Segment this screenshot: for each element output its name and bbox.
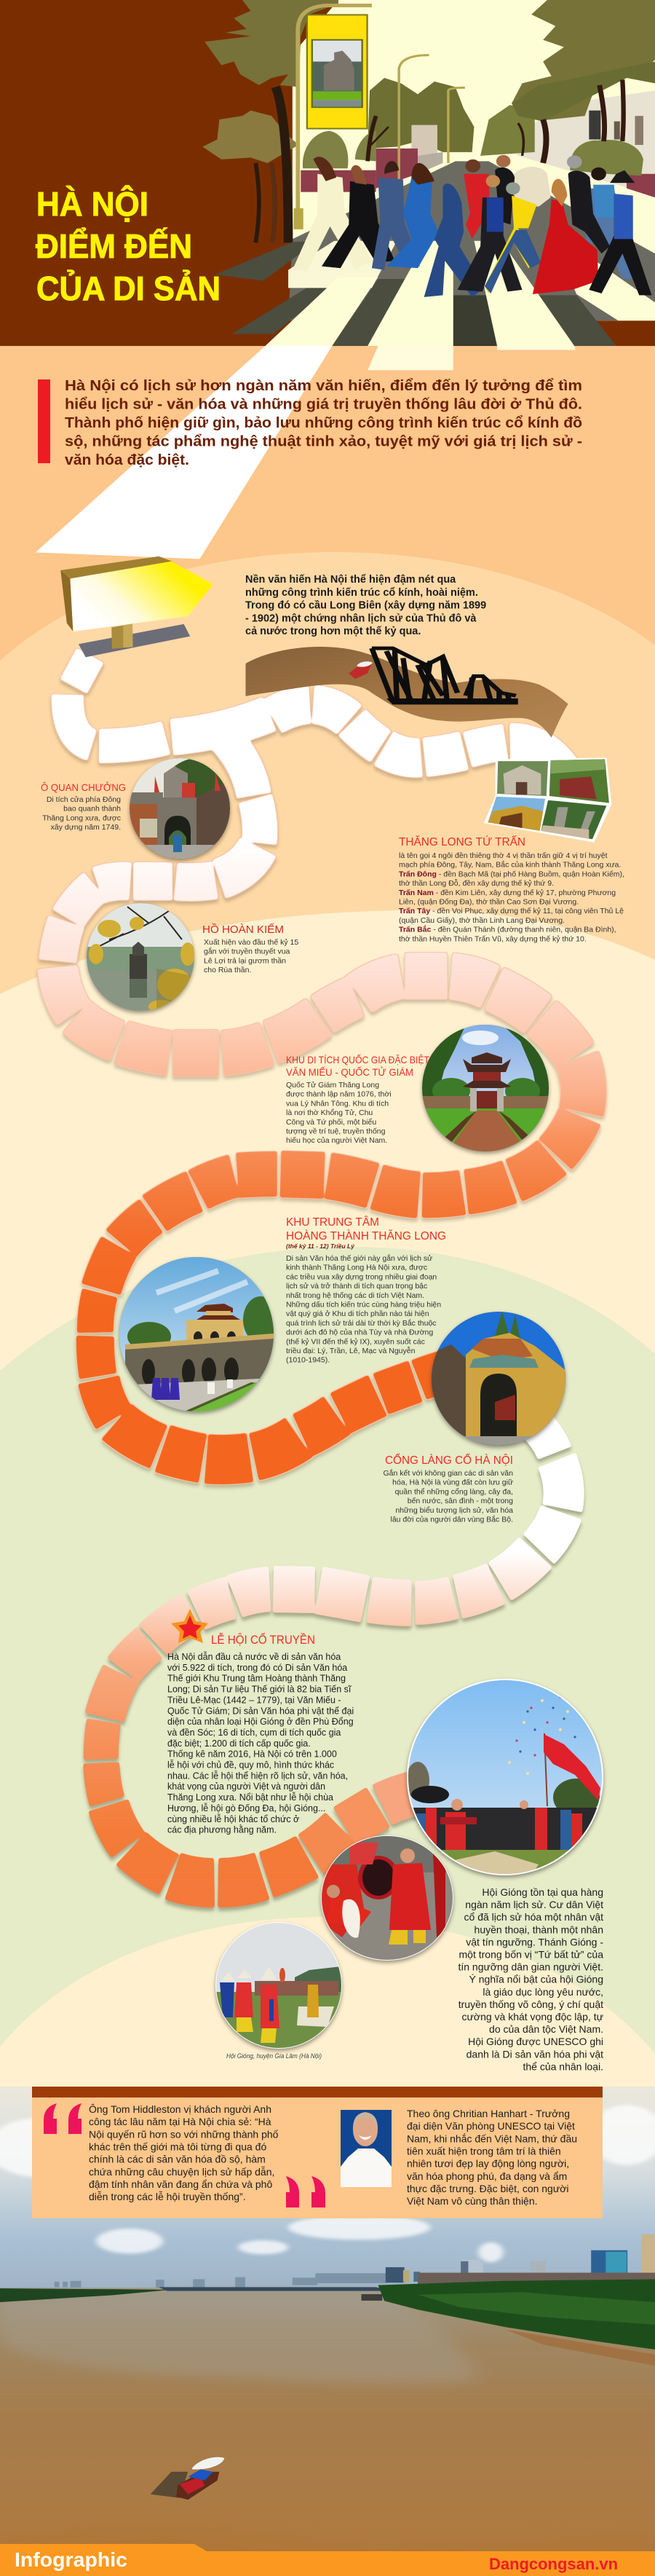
label: O Quan Chuong: bao quanh thành [63,805,121,814]
label: Le hoi co truyen: Thăng Long xưa. Nổi bật như lễ hội chùa [167,1792,333,1803]
label: Van Mieu Quoc Tu Giam: vua Lý Nhân Tông. Khu di tích [286,1099,389,1108]
label: Le hoi co truyen: Thế giới Khu Trung tâm Hoàng thành Thăng [167,1674,346,1684]
street lamps [399,55,465,181]
label: Cong lang co Ha Noi: hóa, Hà Nội là vùng đất còn lưu giữ [392,1478,513,1487]
signpost [60,556,213,657]
panel: river photo [0,2087,655,2576]
label: O Quan Chuong: Di tích cửa phía Đông [47,795,121,804]
label: Thang Long Tu Tran: thờ thần Huyền Thiên Trấn Vũ, xây dựng thế kỷ thứ 10. [399,934,587,943]
label: Hoang Thanh Thang Long: Những dấu tích kiến trúc cùng hàng triệu hiện [286,1301,441,1309]
text: Hoi Giong description: ngàn năm lịch sử. Cư dân Việt [465,1899,603,1910]
label: Van Mieu Quoc Tu Giam: tượng về trí tuệ, truyền thống [286,1127,386,1136]
label: Hoang Thanh Thang Long: lịch sử và trở thành di tích quan trọng bậc [286,1282,427,1291]
title: CỦA DI SẢN [36,269,221,307]
label: Ho Hoan Kiem: cho Rùa thần. [204,966,251,974]
photo: Hoan Kiem lake and Turtle Tower [87,903,195,1014]
label: Cong lang co Ha Noi [383,1453,513,1524]
label: O Quan Chuong: Ô QUAN CHƯỞNG [41,781,126,793]
label: Le hoi co truyen [167,1633,354,1835]
panel: quotes [32,2087,603,2218]
illustration: Long Bien bridge on river ribbon [246,647,568,738]
intro text: Hà Nội có lịch sử hơn ngàn năm văn hiến, điểm đến lý tưởng để tìm [65,378,582,394]
quote: Christian Hanhart: Nam, khi nhắc đến Việt Nam, thứ đầu [407,2132,577,2144]
label: Hoang Thanh Thang Long: (thế kỷ 11 - 12) Triều Lý [286,1242,355,1250]
text: Hoi Giong description: tín ngưỡng dân gian người Việt. [458,1961,603,1973]
label: Thang Long Tu Tran: - đền Kim Liên, xây dựng thế kỷ 17, phường Phương [434,889,616,897]
quote: Tom Hiddleston: chứa những câu chuyện lịch sử hấp dẫn, [89,2166,274,2178]
quote: Christian Hanhart: Việt Nam vô cùng thân thiện. [407,2195,538,2207]
label: Thang Long Tu Tran: (quận Cầu Giấy), thờ thần Linh Lang Đại Vương. [399,916,565,925]
footer: Infographic [15,2548,127,2571]
icon: closing quotation mark [286,2176,325,2207]
quote: Tom Hiddleston: Ông Tom Hiddleston vị khách người Anh [89,2103,271,2115]
portrait: Christian Hanhart [341,2110,392,2187]
text: Hoi Giong description: huyền thoại, thành một nhân [475,1923,603,1935]
intro text: Thành phố hiện giữ gìn, bảo lưu những công trình kiến trúc cổ kính đồ [65,415,582,431]
label: Hoang Thanh Thang Long: (1010-1945). [286,1356,330,1365]
label: Ho Hoan Kiem: HỒ HOÀN KIẾM [202,923,284,936]
label: Thang Long Tu Tran: là tên gọi 4 ngôi đền thiêng thờ 4 vị thần trấn giữ 4 vị trí huyệt [399,851,608,860]
label: Hoang Thanh Thang Long: KHU TRUNG TÂM [286,1215,379,1229]
text: Hoi Giong description: do của dân tộc Việt Nam. [489,2023,603,2035]
label: Cong lang co Ha Noi: quần thể những cổng làng, cây đa, [395,1487,513,1496]
label: Van Mieu Quoc Tu Giam: Quốc Tử Giám Thăng Long [286,1081,379,1090]
photo: Thang Long Imperial Citadel [119,1257,278,1413]
label: Hoang Thanh Thang Long: (thế kỷ VII đến thế kỷ IX), xuyên suốt các [286,1337,425,1346]
label: Thang Long Tu Tran [399,835,624,943]
parked car [509,167,551,207]
label: Ho Hoan Kiem: Lê Lợi trả lại gươm thần [204,956,286,965]
Nen van hien text block: Trong đó có cầu Long Biên (xây dựng năm 1899 [245,600,486,612]
label: Thang Long Tu Tran: Trấn Bắc [399,925,432,934]
text: Hoi Giong description: vật tín ngưỡng. Thánh Gióng - [466,1936,603,1947]
label: Hoang Thanh Thang Long: vật quý giá ở Khu di tích phần nào tái hiện [286,1309,429,1318]
quote: Tom Hiddleston: Nội quyến rũ hơn so với những thành phố [89,2128,279,2140]
text: Hoi Giong description: là giáo dục lòng yêu nước, [483,1986,603,1998]
label: Le hoi co truyen: khát vọng của người Việt và người dân [167,1781,325,1792]
label: Hoang Thanh Thang Long: triều đại: Lý, Trần, Lê, Mạc và Nguyễn [286,1346,416,1355]
quote: Tom Hiddleston: khác trên thế giới mà tôi từng đi qua đó [89,2140,266,2152]
label: Le hoi co truyen: các địa phương hằng năm. [167,1824,277,1835]
label: Hoang Thanh Thang Long: kinh thành Thăng Long Hà Nội xưa, được [286,1264,427,1272]
label: O Quan Chuong: Thăng Long xưa, được [42,814,121,822]
label: Ho Hoan Kiem [202,923,298,974]
label: Thang Long Tu Tran: - đền Voi Phục, xây dựng thế kỷ 11, tại công viên Thủ Lệ [430,907,624,915]
label: Le hoi co truyen: lễ hội với chủ đề, quy mô, hình thức khác [167,1760,334,1770]
label: O Quan Chuong: xây dựng năm 1749. [51,823,121,832]
label: Ho Hoan Kiem: gắn với truyền thuyết vua [204,947,290,956]
label: Le hoi co truyen: Long; Di sản Tư liệu Thế giới là 82 bia Tiến sĩ [167,1685,352,1695]
Nen van hien text block: Nền văn hiến Hà Nội thể hiện đậm nét qua [245,574,456,586]
label: Le hoi co truyen: cùng nhiều lễ hội khác tổ chức ở [167,1813,299,1824]
quote: Christian Hanhart: thực đặc trưng. Đặc biệt, con người [407,2183,569,2194]
intro text: sộ, những tác phẩm nghệ thuật tinh xảo, tuyệt mỹ với giá trị lịch sử - [65,434,582,450]
label: Cong lang co Ha Noi: CỔNG LÀNG CỔ HÀ NỘI [385,1453,513,1467]
quote: Christian Hanhart: tiên xuất hiện trong tâm trí là thiên [407,2145,561,2156]
title: ĐIỂM ĐẾN [36,227,192,265]
label: Le hoi co truyen: Thống kê năm 2016, Hà Nội có trên 1.000 [167,1749,337,1760]
caption: Hoi Giong photo: Hội Gióng, huyện Gia Lâm (Hà Nội) [226,2052,322,2060]
quote: Tom Hiddleston: công tác lâu năm tại Hà Nội chia sẻ: “Hà [89,2116,271,2127]
label: Hoang Thanh Thang Long: nhất trong hệ thống các di tích Việt Nam. [286,1291,424,1300]
intro text: văn hóa đặc biệt. [65,452,189,468]
photo: Giong festival procession [215,1922,342,2050]
label: Hoang Thanh Thang Long [286,1215,446,1365]
label: Cong lang co Ha Noi: Gắn kết với không gian các di sản văn [383,1468,513,1478]
text: Hoi Giong description: Ý nghĩa nổi bật của hội Gióng [469,1974,603,1985]
icon: star [171,1609,208,1643]
crowd crossing the road [293,155,651,297]
photo: village gate [432,1311,566,1446]
label: Van Mieu Quoc Tu Giam: KHU DI TÍCH QUỐC GIA ĐẶC BIỆT [286,1053,429,1066]
text: Hoi Giong description: danh là Di sản văn hóa phi vật [467,2048,603,2060]
Nen van hien text block: cả nước trong hơn một thế kỷ qua. [245,626,421,637]
street banner [294,5,372,229]
label: Thang Long Tu Tran: Trấn Đông [399,870,437,878]
text: Hoi Giong description: Hội Gióng tồn tại qua hàng [482,1886,603,1898]
label: Van Mieu Quoc Tu Giam: VĂN MIẾU - QUỐC TỬ GIÁM [286,1066,413,1078]
label: Van Mieu Quoc Tu Giam: được thành lập năm 1076, thời [286,1090,392,1099]
label: Le hoi co truyen: Quốc Tử Giám; Di sản Văn hóa phi vật thể đại [167,1706,354,1716]
text: Hoi Giong description: một trong bốn vị “Tứ bất tử” của [458,1949,603,1961]
photo collage: four guardian temples [484,758,611,842]
text: Hoi Giong description: thể của nhân loại. [523,2060,603,2072]
label: Le hoi co truyen: nhau. Các lễ hội thể hiện rõ lịch sử, văn hóa, [167,1770,348,1781]
title: HÀ NỘI [36,185,148,223]
label: Le hoi co truyen: với 5.922 di tích, trong đó có Di sản Văn hóa [167,1663,347,1673]
footer [0,2544,655,2576]
quote: Christian Hanhart: đại diện Văn phòng UNESCO tại Việt [407,2120,575,2132]
road: path of tiles from the village gate to the festival photos [101,1424,564,1883]
label: Hoang Thanh Thang Long: HOÀNG THÀNH THĂNG LONG [286,1229,446,1242]
label: Le hoi co truyen: và đền Sóc; 16 di tích, cụm di tích quốc gia [167,1728,341,1738]
label: Cong lang co Ha Noi: bến nước, sân đình - một trong [408,1497,513,1505]
intro text [65,378,582,468]
icon: opening quotation mark [44,2103,82,2134]
quote: Tom Hiddleston: đậm tính nhân văn đang ẩn chứa và phô [89,2178,272,2190]
zebra crossing [215,241,655,346]
text: Hoi Giong description: cường và khát vọng độc lập, tự [462,2011,603,2022]
photo: Giong festival main [406,1679,603,1875]
label: Hoang Thanh Thang Long: quá trình lịch sử trải dài từ thời kỳ Bắc thuộc [286,1318,437,1328]
photo: Giong festival drum [321,1835,453,1961]
label: Thang Long Tu Tran: THĂNG LONG TỨ TRẤN [399,835,525,848]
label: Le hoi co truyen: LỄ HỘI CỔ TRUYỀN [211,1633,315,1647]
label: Hoang Thanh Thang Long: Di sản Văn hóa thế giới này gắn với lịch sử [286,1253,432,1263]
label: Van Mieu Quoc Tu Giam: là nơi thờ Khổng Tử, Chu [286,1108,373,1117]
footer: Dangcongsan.vn [489,2555,618,2573]
quote: Christian Hanhart: văn hóa phong phú, đa dạng và ẩm [407,2170,567,2182]
quote: Christian Hanhart: nhiên tươi đẹp lay động lòng người, [407,2158,569,2170]
label: O Quan Chuong [41,781,126,832]
text: Hoi Giong description: cổ đã lịch sử hóa một nhân vật [464,1911,603,1923]
quote: Tom Hiddleston: diễn trong các lễ hội truyền thống”. [89,2191,246,2202]
title [36,185,221,307]
Nen van hien text block: - 1902) một chứng nhân lịch sử của Thủ đô và [245,613,477,624]
intro text: hiểu lịch sử - văn hóa và những giá trị truyền thống lâu đời ở Thủ đô. [65,396,582,412]
photo: Van Mieu Quoc Tu Giam [422,1025,549,1152]
road: path of tiles from the signpost to the village gate [57,654,584,1460]
label: Cong lang co Ha Noi: lâu đời của người dân vùng Bắc Bộ. [390,1515,513,1524]
white road stripes leading out of the header [36,346,576,559]
panel: header scene [0,0,655,346]
label: Van Mieu Quoc Tu Giam: Công và Tứ phối, một biểu [286,1118,376,1127]
label: Van Mieu Quoc Tu Giam [286,1053,429,1145]
intro accent bar [38,379,50,463]
label: Ho Hoan Kiem: Xuất hiện vào đầu thế kỷ 15 [204,938,298,947]
label: Le hoi co truyen: diện của nhân loại Hội Gióng ở đền Phù Đổng [167,1717,354,1727]
label: Le hoi co truyen: Hương, lễ hội gò Đống Đa, hội Gióng... [167,1803,325,1813]
text: Hoi Giong description: truyền thống võ công, ý chí quật [458,1998,603,2010]
label: Cong lang co Ha Noi: những biểu tượng lịch sử, văn hóa [395,1506,513,1515]
label: Hoang Thanh Thang Long: dưới ách đô hộ của nhà Tùy và nhà Đường [286,1328,433,1337]
label: Thang Long Tu Tran: Trấn Tây [399,907,430,915]
label: Thang Long Tu Tran: - đền Bạch Mã (tại phố Hàng Buồm, quận Hoàn Kiếm), [437,870,624,878]
quote: Christian Hanhart: Theo ông Chritian Hanhart - Trưởng [407,2108,570,2119]
label: Hoang Thanh Thang Long: các triều vua xây dựng trong nhiều giai đoạn [286,1272,437,1281]
label: Le hoi co truyen: Triều Lê-Mạc (1442 – 1779), tại Văn Miếu - [167,1695,341,1705]
label: Le hoi co truyen: đặc biệt; 1.200 di tích cấp quốc gia. [167,1738,311,1749]
quote: Tom Hiddleston: chính là các di sản văn hóa đồ sộ, hàm [89,2154,266,2165]
label: Thang Long Tu Tran: thờ thần Long Đỗ, đền xây dựng thế kỷ thứ 9. [399,878,554,888]
photo: O Quan Chuong gate [130,757,240,859]
text: Hoi Giong description: Hội Gióng được UNESCO ghi [468,2036,603,2047]
label: Thang Long Tu Tran: Trấn Nam [399,889,434,897]
label: Thang Long Tu Tran: - đền Quán Thánh (đường thanh niên, quận Ba Đình), [431,926,616,934]
label: Van Mieu Quoc Tu Giam: hiếu học của người Việt Nam. [286,1136,387,1145]
label: Le hoi co truyen: Hà Nội dẫn đầu cả nước về di sản văn hóa [167,1651,341,1662]
label: Thang Long Tu Tran: mạch phía Đông, Tây, Nam, Bắc của kinh thành Thăng Long xưa. [399,860,621,870]
Nen van hien text block: những công trình kiến trúc cổ kính, hoài niệm. [245,587,478,599]
label: Thang Long Tu Tran: Liên, (quận Đống Đa), thờ thần Cao Sơn Đại Vương. [399,897,579,906]
